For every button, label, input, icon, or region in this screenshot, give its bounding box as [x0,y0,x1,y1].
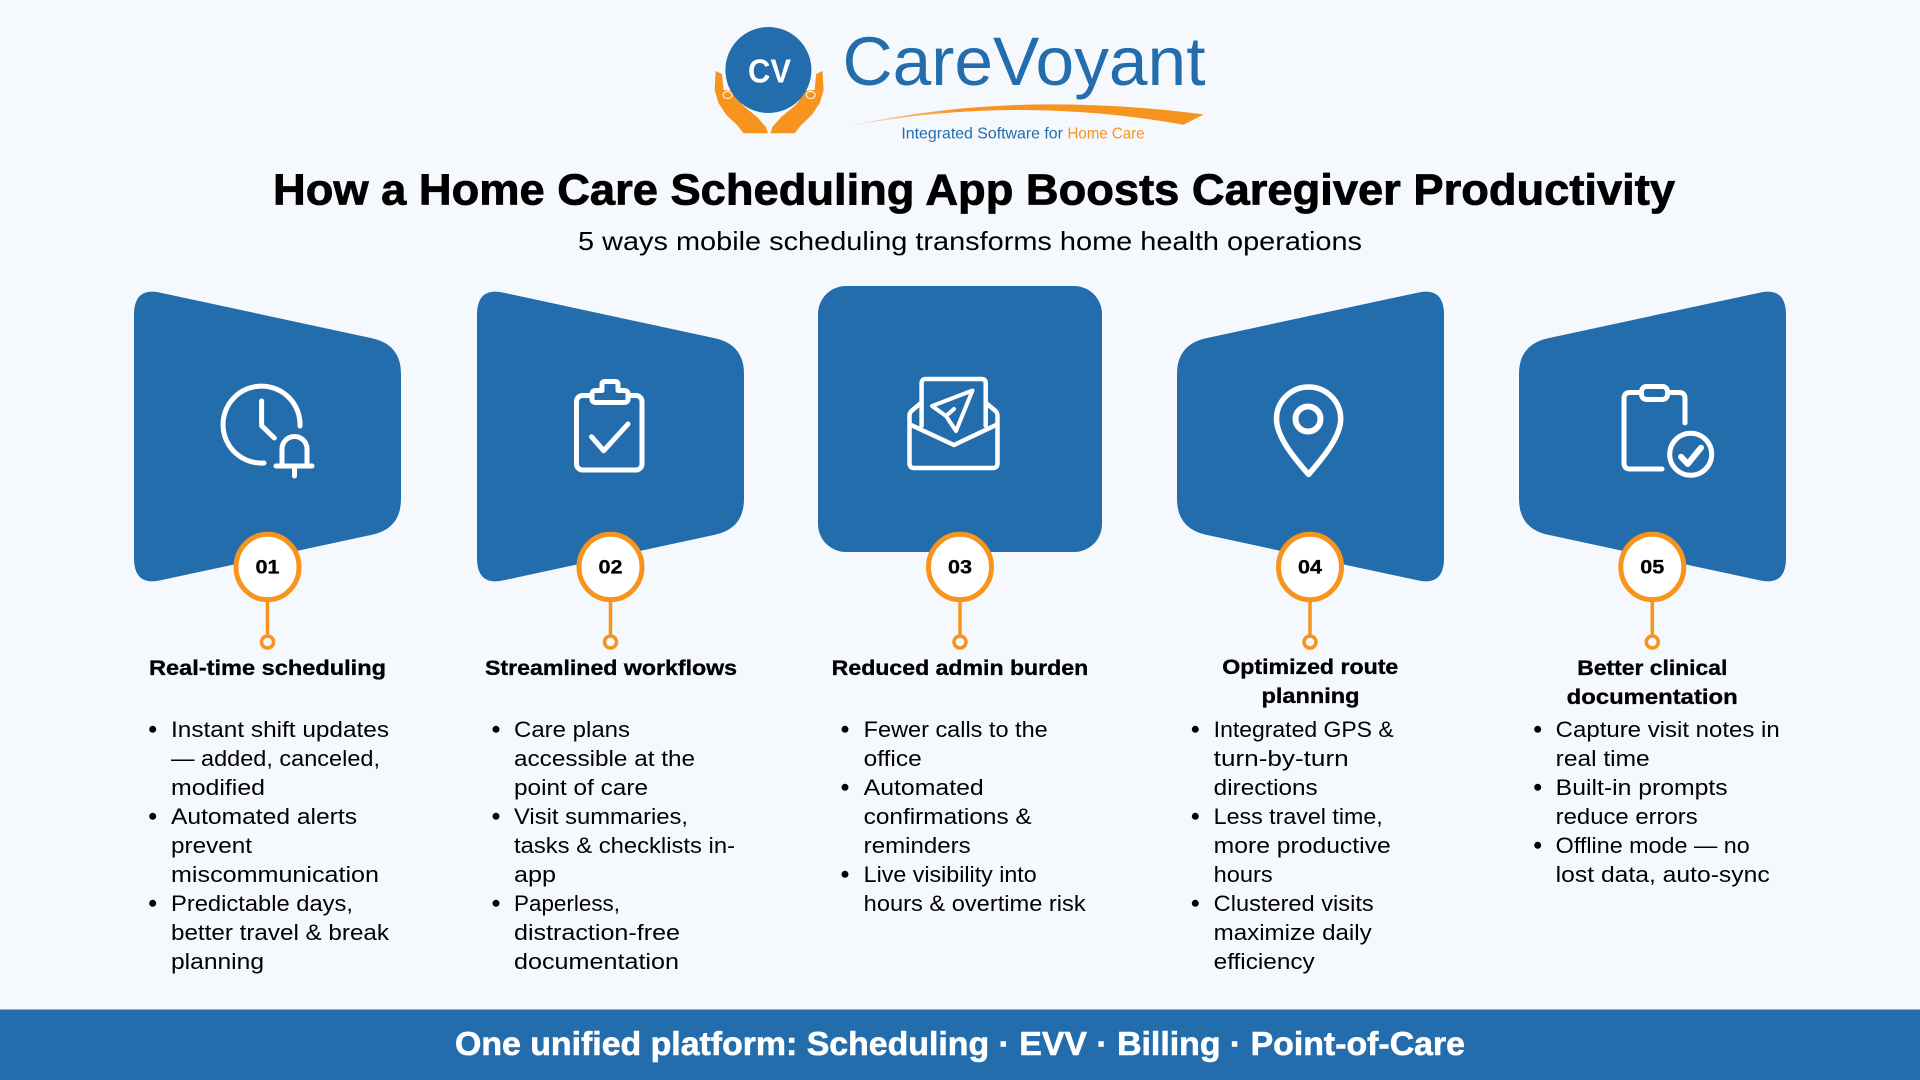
bullet list: Automated alerts [171,804,357,829]
bullet list [492,717,735,974]
bullet list: real time [1556,746,1650,771]
number badge 03 [928,534,992,648]
logo swoosh [842,104,1204,128]
bullet list: distraction-free [514,920,680,945]
icon: blue logo circle [725,27,811,113]
subtitle: 5 ways mobile scheduling transforms home health operations [578,226,1362,256]
panel: 03 reduced admin burden [818,286,1102,916]
heading: planning [1262,684,1360,708]
bullet list: Automated [864,775,984,800]
bullet list: miscommunication [171,862,379,887]
bullet list: directions [1214,775,1318,800]
heading: Better clinical [1577,656,1727,680]
bullet list: better travel & break [171,920,390,945]
panel: 05 better clinical documentation [1519,292,1786,887]
bullet list: reminders [864,833,971,858]
panel: 04 optimized route planning [1177,292,1444,974]
bullet list: tasks & checklists in- [514,833,735,858]
bullet list: Fewer calls to the [864,717,1048,742]
bullet list: point of care [514,775,648,800]
heading: documentation [1567,685,1738,709]
number badge 04: 04 [1298,558,1322,578]
bullet list: Integrated GPS & [1214,717,1394,742]
bullet list: app [514,862,556,887]
logo tagline: Integrated Software for [901,125,1064,142]
bullet list: Live visibility into [864,862,1037,887]
bullet list: Predictable days, [171,891,353,916]
bullet list: prevent [171,833,252,858]
icon: orange left hand [715,71,768,133]
number badge 04 [1278,534,1342,648]
bullet list: Visit summaries, [514,804,688,829]
icon: orange right hand [770,71,824,133]
logo wordmark: CareVoyant [842,23,1206,100]
bullet list: accessible at the [514,746,695,771]
bullet list: maximize daily [1214,920,1372,945]
logo monogram: CV [748,52,791,90]
number badge 02: 02 [598,558,622,578]
card shape [1519,292,1786,581]
bullet list: Clustered visits [1214,891,1374,916]
bullet list [149,717,390,974]
bullet list [842,717,1087,916]
footer banner [0,1010,1920,1080]
number badge 05 [1621,534,1684,648]
heading: Real-time scheduling [149,656,386,680]
logo: CareVoyant [715,23,1206,142]
bullet list: hours [1214,862,1273,887]
logo tagline [901,125,1145,142]
heading: Optimized route [1222,655,1398,679]
bullet list: — added, canceled, [171,746,380,771]
title: How a Home Care Scheduling App Boosts Caregiver Productivity [273,165,1676,214]
number badge 03: 03 [948,558,972,578]
bullet list: reduce errors [1556,804,1698,829]
panel: 01 real-time scheduling [134,292,401,974]
bullet list: office [864,746,922,771]
bullet list: Offline mode — no [1556,833,1750,858]
logo tagline: Home Care [1068,125,1145,142]
number badge 02 [579,534,642,648]
heading: Streamlined workflows [485,656,737,680]
bullet list: hours & overtime risk [864,891,1087,916]
bullet list: Built-in prompts [1556,775,1728,800]
number badge 05: 05 [1640,558,1665,578]
icon: clock with bell [223,386,312,476]
bullet list [1192,717,1394,974]
heading: Reduced admin burden [832,656,1088,680]
bullet list: Paperless, [514,891,620,916]
bullet list: documentation [514,949,679,974]
bullet list: modified [171,775,265,800]
bullet list: Instant shift updates [171,717,389,742]
bullet list: Less travel time, [1214,804,1383,829]
icon: clipboard with check badge [1624,386,1712,475]
footer text: One unified platform: Scheduling · EVV · Billing · Point-of-Care [455,1025,1465,1062]
bullet list: confirmations & [864,804,1032,829]
bullet list [1534,717,1780,887]
bullet list: more productive [1214,833,1391,858]
number badge 01 [236,534,299,648]
bullet list: lost data, auto-sync [1556,862,1770,887]
card shape [1177,292,1444,581]
icon: envelope with paper plane [910,379,998,468]
bullet list: turn-by-turn [1214,746,1349,771]
card shape [134,292,401,581]
heading [1222,655,1398,708]
bullet list: planning [171,949,264,974]
icon: clipboard with check [576,382,642,470]
bullet list: Care plans [514,717,630,742]
icon: location pin [1276,387,1341,474]
bullet list: Capture visit notes in [1556,717,1780,742]
number badge 01: 01 [256,558,280,578]
panel: 02 streamlined workflows [477,292,744,974]
heading [1567,656,1738,709]
card shape [477,292,744,581]
card shape [818,286,1102,552]
bullet list: efficiency [1214,949,1315,974]
